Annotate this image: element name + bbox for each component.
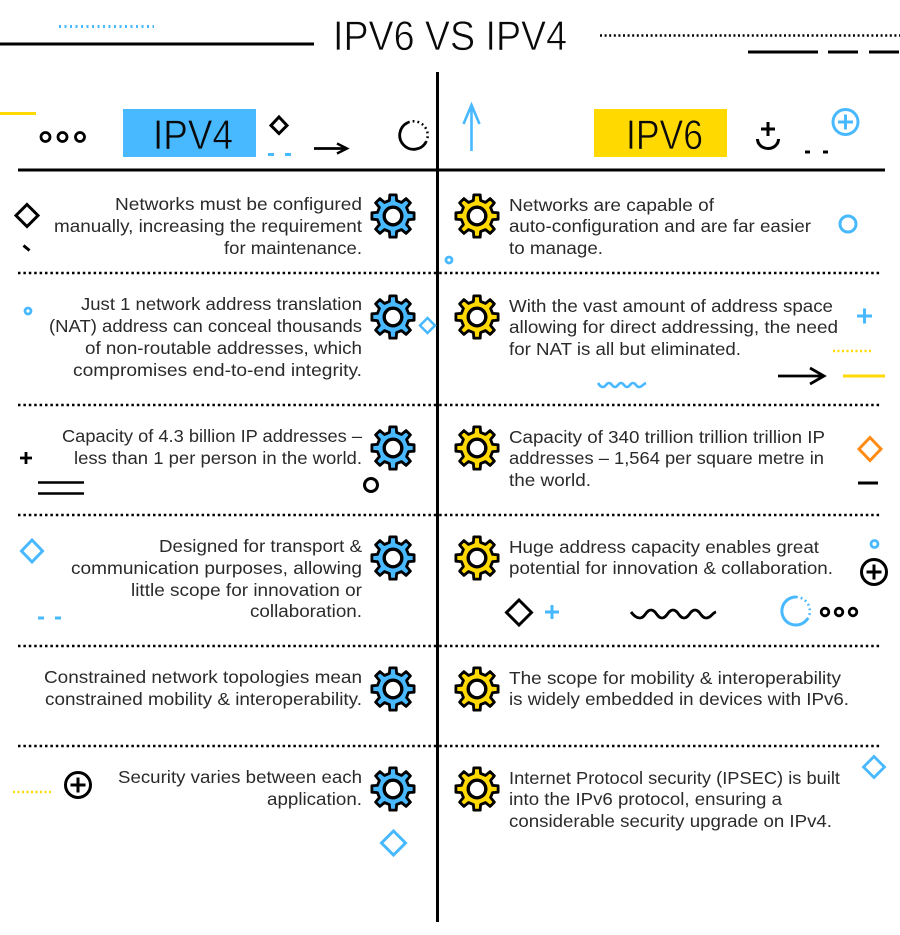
header rule bbox=[18, 168, 885, 172]
row 4: IPv4 text: little scope for innovation or bbox=[131, 580, 362, 600]
row 6: IPv6 text bbox=[509, 768, 840, 831]
row 1: IPv6 text: to manage. bbox=[509, 238, 603, 258]
row 6: IPv6 text: Internet Protocol security (IPSEC) is built bbox=[509, 768, 840, 788]
row 6: IPv6 text: considerable security upgrade on IPv4. bbox=[509, 811, 832, 831]
row 4: IPv4 text bbox=[71, 536, 362, 621]
row 1: IPv4 text bbox=[54, 194, 362, 258]
row 5: IPv4 text: Constrained network topologies mean bbox=[44, 667, 362, 687]
row 3: IPv4 text bbox=[62, 426, 362, 468]
row 1: IPv4 text: Networks must be configured bbox=[115, 194, 362, 214]
row 1: IPv6 text: auto-configuration and are far easier bbox=[509, 216, 811, 236]
blue gear icons bbox=[372, 195, 414, 810]
yellow gear icons bbox=[456, 195, 498, 810]
row 2: IPv4 text: compromises end-to-end integrity. bbox=[73, 360, 362, 380]
row 2: IPv4 text: (NAT) address can conceal thousands bbox=[49, 316, 362, 336]
header icons right bbox=[464, 105, 858, 152]
row 5: IPv6 text bbox=[509, 668, 849, 709]
heading: IPV4: IPV4 bbox=[153, 111, 233, 158]
row 6: IPv4 text: application. bbox=[267, 789, 362, 809]
row 4: IPv6 text: Huge address capacity enables great bbox=[509, 537, 819, 557]
row 5: IPv6 text: is widely embedded in devices with IPv6. bbox=[509, 689, 849, 709]
row 2: IPv4 text bbox=[49, 294, 362, 380]
row 5: IPv4 text: constrained mobility & interoperability. bbox=[45, 689, 362, 709]
row 5: IPv4 text bbox=[44, 667, 362, 709]
row 1: IPv4 text: manually, increasing the requirement bbox=[54, 216, 362, 236]
row 1: IPv4 text: for maintenance. bbox=[224, 238, 362, 258]
row 2: IPv4 text: of non-routable addresses, which bbox=[85, 338, 362, 358]
row 1: IPv6 text bbox=[509, 195, 811, 258]
row 3: IPv6 text bbox=[509, 427, 825, 490]
title decoration left bbox=[0, 26, 314, 44]
row dividers bbox=[18, 273, 882, 746]
row 1: IPv6 text: Networks are capable of bbox=[509, 195, 714, 215]
row 3: IPv6 text: Capacity of 340 trillion trillion trillion IP bbox=[509, 427, 825, 447]
row 2: IPv6 text: With the vast amount of address space bbox=[509, 296, 833, 316]
heading: IPV6: IPV6 bbox=[626, 111, 703, 158]
row 2: IPv6 text: for NAT is all but eliminated. bbox=[509, 339, 741, 359]
decorative icons left column bbox=[13, 204, 452, 855]
row 6: IPv6 text: into the IPv6 protocol, ensuring a bbox=[509, 789, 782, 809]
row 3: IPv4 text: Capacity of 4.3 billion IP addresses – bbox=[62, 426, 362, 446]
row 6: IPv4 text: Security varies between each bbox=[118, 767, 362, 787]
title decoration right bbox=[600, 36, 900, 52]
row 6: IPv4 text bbox=[118, 767, 362, 809]
row 2: IPv4 text: Just 1 network address translation bbox=[81, 294, 362, 314]
row 3: IPv6 text: addresses – 1,564 per square metre in bbox=[509, 448, 824, 468]
header icons left bbox=[0, 114, 428, 154]
decorative icons right column bbox=[506, 216, 886, 778]
row 4: IPv4 text: collaboration. bbox=[250, 601, 362, 621]
row 3: IPv6 text: the world. bbox=[509, 470, 591, 490]
row 4: IPv6 text bbox=[509, 537, 833, 578]
title: IPV6 VS IPV4 bbox=[333, 12, 567, 59]
row 4: IPv4 text: communication purposes, allowing bbox=[71, 558, 362, 578]
heading: IPV4 bbox=[123, 109, 256, 158]
row 4: IPv4 text: Designed for transport & bbox=[159, 536, 362, 556]
row 3: IPv4 text: less than 1 per person in the world. bbox=[74, 448, 362, 468]
heading: IPV6 bbox=[594, 109, 727, 158]
row 4: IPv6 text: potential for innovation & collaboration. bbox=[509, 558, 833, 578]
row 5: IPv6 text: The scope for mobility & interoperability bbox=[509, 668, 841, 688]
row 2: IPv6 text: allowing for direct addressing, the need bbox=[509, 317, 838, 337]
row 2: IPv6 text bbox=[509, 296, 838, 359]
centre divider bbox=[436, 72, 439, 922]
